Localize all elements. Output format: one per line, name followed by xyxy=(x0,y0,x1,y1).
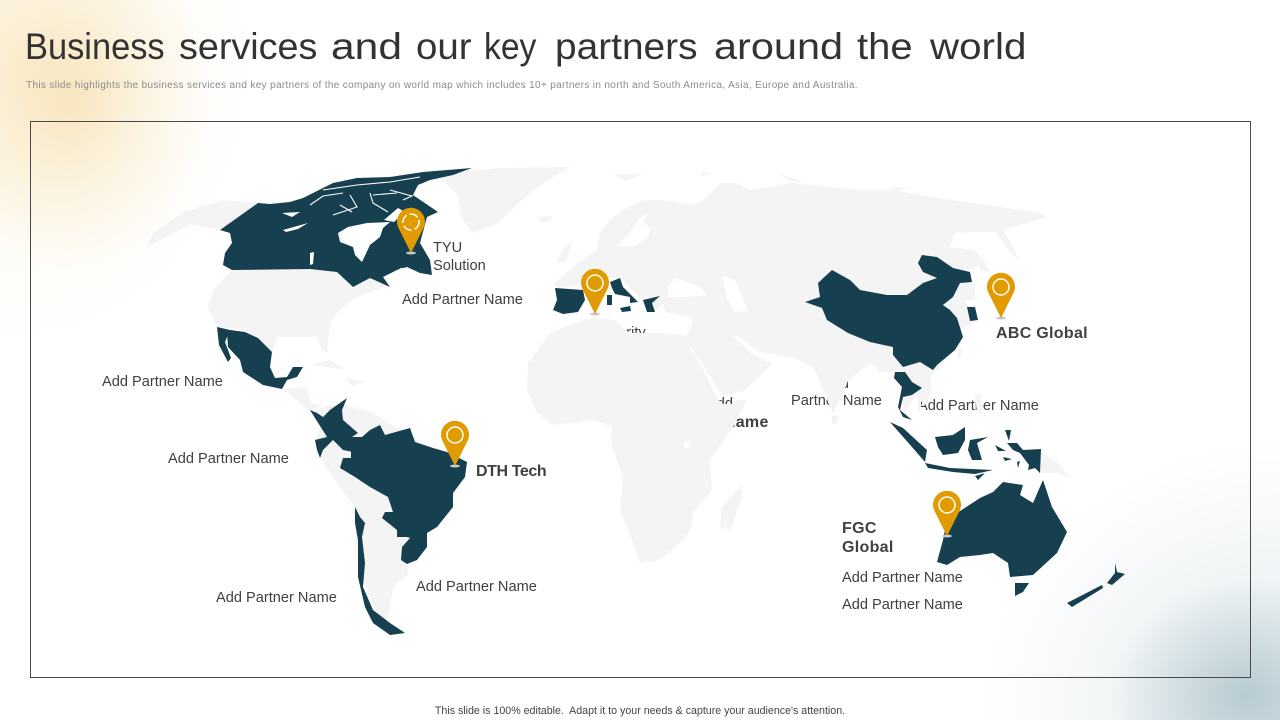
title xyxy=(25,26,1026,67)
labels hidden behind the map: Partner Name xyxy=(661,414,769,431)
label: partner north america: Add Partner Name xyxy=(402,292,523,308)
Chile xyxy=(355,507,405,635)
title: and xyxy=(331,26,402,67)
labels hidden behind the map xyxy=(593,325,1039,431)
Greece xyxy=(643,296,660,312)
title: around xyxy=(714,26,843,67)
title: Business xyxy=(25,26,165,67)
label: partner argentina: Add Partner Name xyxy=(416,579,537,595)
label: partner chile: Add Partner Name xyxy=(216,590,337,606)
label: ABC Global: ABC Global xyxy=(996,325,1088,342)
title: our xyxy=(416,26,472,67)
South Korea xyxy=(967,307,978,321)
pin: TYU Solution xyxy=(397,208,425,254)
Indonesia xyxy=(890,422,1041,480)
label: DTH Tech: DTH Tech xyxy=(476,463,546,480)
China xyxy=(805,255,972,370)
Australia xyxy=(937,480,1067,596)
pin: DTH Tech xyxy=(441,421,469,468)
labels hidden behind the map: Add xyxy=(823,376,849,392)
labels hidden behind the map: Add Partner Name xyxy=(918,398,1039,414)
label: TYU Solution: Solution xyxy=(433,258,486,274)
Brazil and Paraguay, Uruguay xyxy=(340,425,467,564)
Mexico xyxy=(217,327,303,389)
footer note: This slide is 100% editable. Adapt it to your needs & capture your audience's attention. xyxy=(435,705,845,717)
labels hidden behind the map: Add xyxy=(707,396,733,412)
pin: FGC Global xyxy=(933,491,961,538)
pin: ABC Global xyxy=(987,273,1015,320)
label: partner australia one: Add Partner Name xyxy=(842,570,963,586)
labels hidden behind the map: Security xyxy=(593,325,646,341)
label: partner colombia: Add Partner Name xyxy=(168,451,289,467)
grey continents xyxy=(147,167,1070,633)
Colombia and Ecuador xyxy=(310,398,358,458)
Italy xyxy=(607,278,638,312)
Thailand xyxy=(894,372,922,420)
pin: Europe xyxy=(581,269,609,316)
title: key xyxy=(484,26,536,67)
label: TYU Solution: TYU xyxy=(433,240,462,256)
label: FGC Global: Global xyxy=(842,539,894,556)
Spain and Portugal xyxy=(553,288,585,314)
title: the xyxy=(857,26,913,67)
title: partners xyxy=(555,26,698,67)
New Zealand xyxy=(1067,563,1125,607)
labels hidden behind the map: Partner Name xyxy=(791,393,882,409)
Canada xyxy=(220,168,472,287)
title: world xyxy=(930,26,1026,67)
white water bodies xyxy=(617,213,755,448)
label: FGC Global: FGC xyxy=(842,520,877,537)
subtitle: This slide highlights the business services and key partners of the company on world map which includes 10+ partners in north and South America, Asia, Europe and Australia. xyxy=(26,80,858,91)
title: services xyxy=(179,26,317,67)
label: partner australia two: Add Partner Name xyxy=(842,597,963,613)
dark highlighted countries xyxy=(217,168,1125,635)
label: partner mexico: Add Partner Name xyxy=(102,374,223,390)
